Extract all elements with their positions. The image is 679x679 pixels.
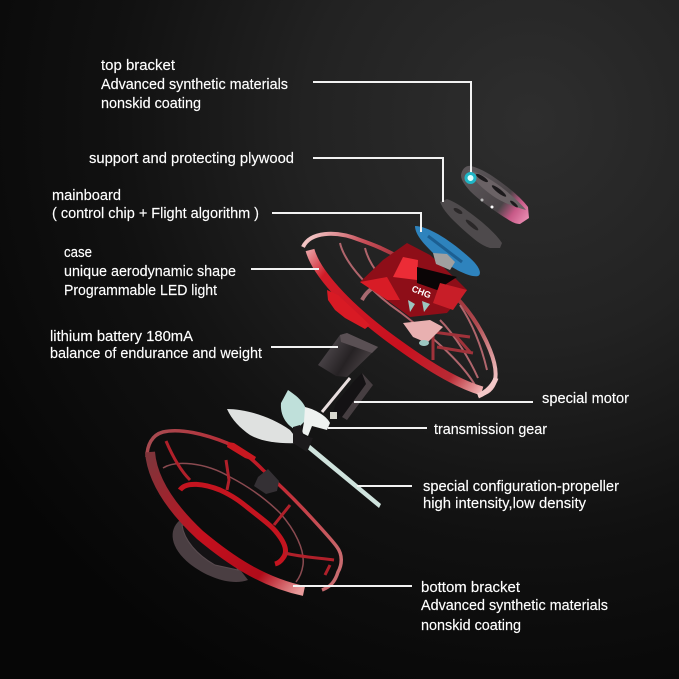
indicator: cyan dot xyxy=(466,174,475,182)
case end highlight xyxy=(478,378,496,396)
label: case: case xyxy=(64,244,92,261)
case hub xyxy=(360,243,467,346)
leader line: case xyxy=(251,268,319,270)
label: battery xyxy=(50,328,263,362)
case ring back rim xyxy=(303,234,496,395)
case tab xyxy=(327,290,370,329)
leader line: mainboard xyxy=(272,213,421,232)
label: case: Programmable LED light xyxy=(64,282,218,299)
label: mainboard: mainboard xyxy=(52,187,121,204)
bottom ring back rim xyxy=(147,431,341,590)
blade: long xyxy=(305,444,381,508)
blade: left xyxy=(227,409,300,443)
part: mainboard xyxy=(415,226,480,276)
label: case xyxy=(64,244,236,299)
bottom ring front band xyxy=(150,452,304,591)
bottom ring thin middle ring xyxy=(163,463,303,582)
label: case: unique aerodynamic shape xyxy=(64,263,236,280)
chip label on case: CHG xyxy=(410,284,433,300)
part: case xyxy=(303,234,496,396)
leader line: bottom bracket xyxy=(293,585,412,587)
leader line: top bracket xyxy=(313,82,471,175)
label: bottom bracket: bottom bracket xyxy=(421,579,521,596)
label: bottom bracket xyxy=(421,579,608,634)
label: transmission gear: transmission gear xyxy=(434,421,547,438)
case inner rings xyxy=(340,243,487,385)
part: support plywood xyxy=(440,199,502,248)
case ring front band xyxy=(310,250,482,391)
part: special motor xyxy=(330,373,373,420)
label: propeller: high intensity,low density xyxy=(423,495,586,512)
leader line: transmission gear xyxy=(328,427,427,429)
leader line: plywood xyxy=(313,158,443,202)
transmission gear xyxy=(302,407,330,436)
label: motor: special motor xyxy=(542,390,629,407)
label: top bracket: nonskid coating xyxy=(101,95,201,112)
part: top bracket xyxy=(461,166,529,224)
bottom ring inner opening xyxy=(180,484,285,564)
leader line: motor xyxy=(354,401,533,403)
propeller hub xyxy=(293,425,313,452)
label: top bracket: Advanced synthetic materials xyxy=(101,76,288,93)
label: battery: lithium battery 180mA xyxy=(50,328,193,345)
leader line: propeller xyxy=(357,485,412,487)
bottom bracket tab xyxy=(227,442,256,461)
label: mainboard: ( control chip + Flight algorithm ) xyxy=(52,205,259,222)
label: bottom bracket: nonskid coating xyxy=(421,617,521,634)
label: mainboard xyxy=(52,187,259,222)
part: propeller xyxy=(227,378,381,508)
label: battery: balance of endurance and weight xyxy=(50,345,263,362)
label: propeller: special configuration-propeller xyxy=(423,478,619,495)
case spokes xyxy=(433,330,473,360)
bottom bracket gear block xyxy=(254,469,279,494)
label: propeller xyxy=(423,478,619,512)
label: plywood: support and protecting plywood xyxy=(89,150,294,167)
part: lithium battery xyxy=(318,333,378,377)
leader line: battery xyxy=(271,346,338,348)
motor shaft xyxy=(322,378,350,412)
label: top bracket xyxy=(101,57,288,112)
bottom ring spokes xyxy=(166,441,334,575)
part: bottom bracket xyxy=(147,431,341,591)
label: bottom bracket: Advanced synthetic materials xyxy=(421,597,608,614)
case arc xyxy=(362,284,403,300)
blade: upper xyxy=(281,390,308,430)
motor cover under bottom bracket xyxy=(173,520,248,582)
label: top bracket: top bracket xyxy=(101,57,176,74)
